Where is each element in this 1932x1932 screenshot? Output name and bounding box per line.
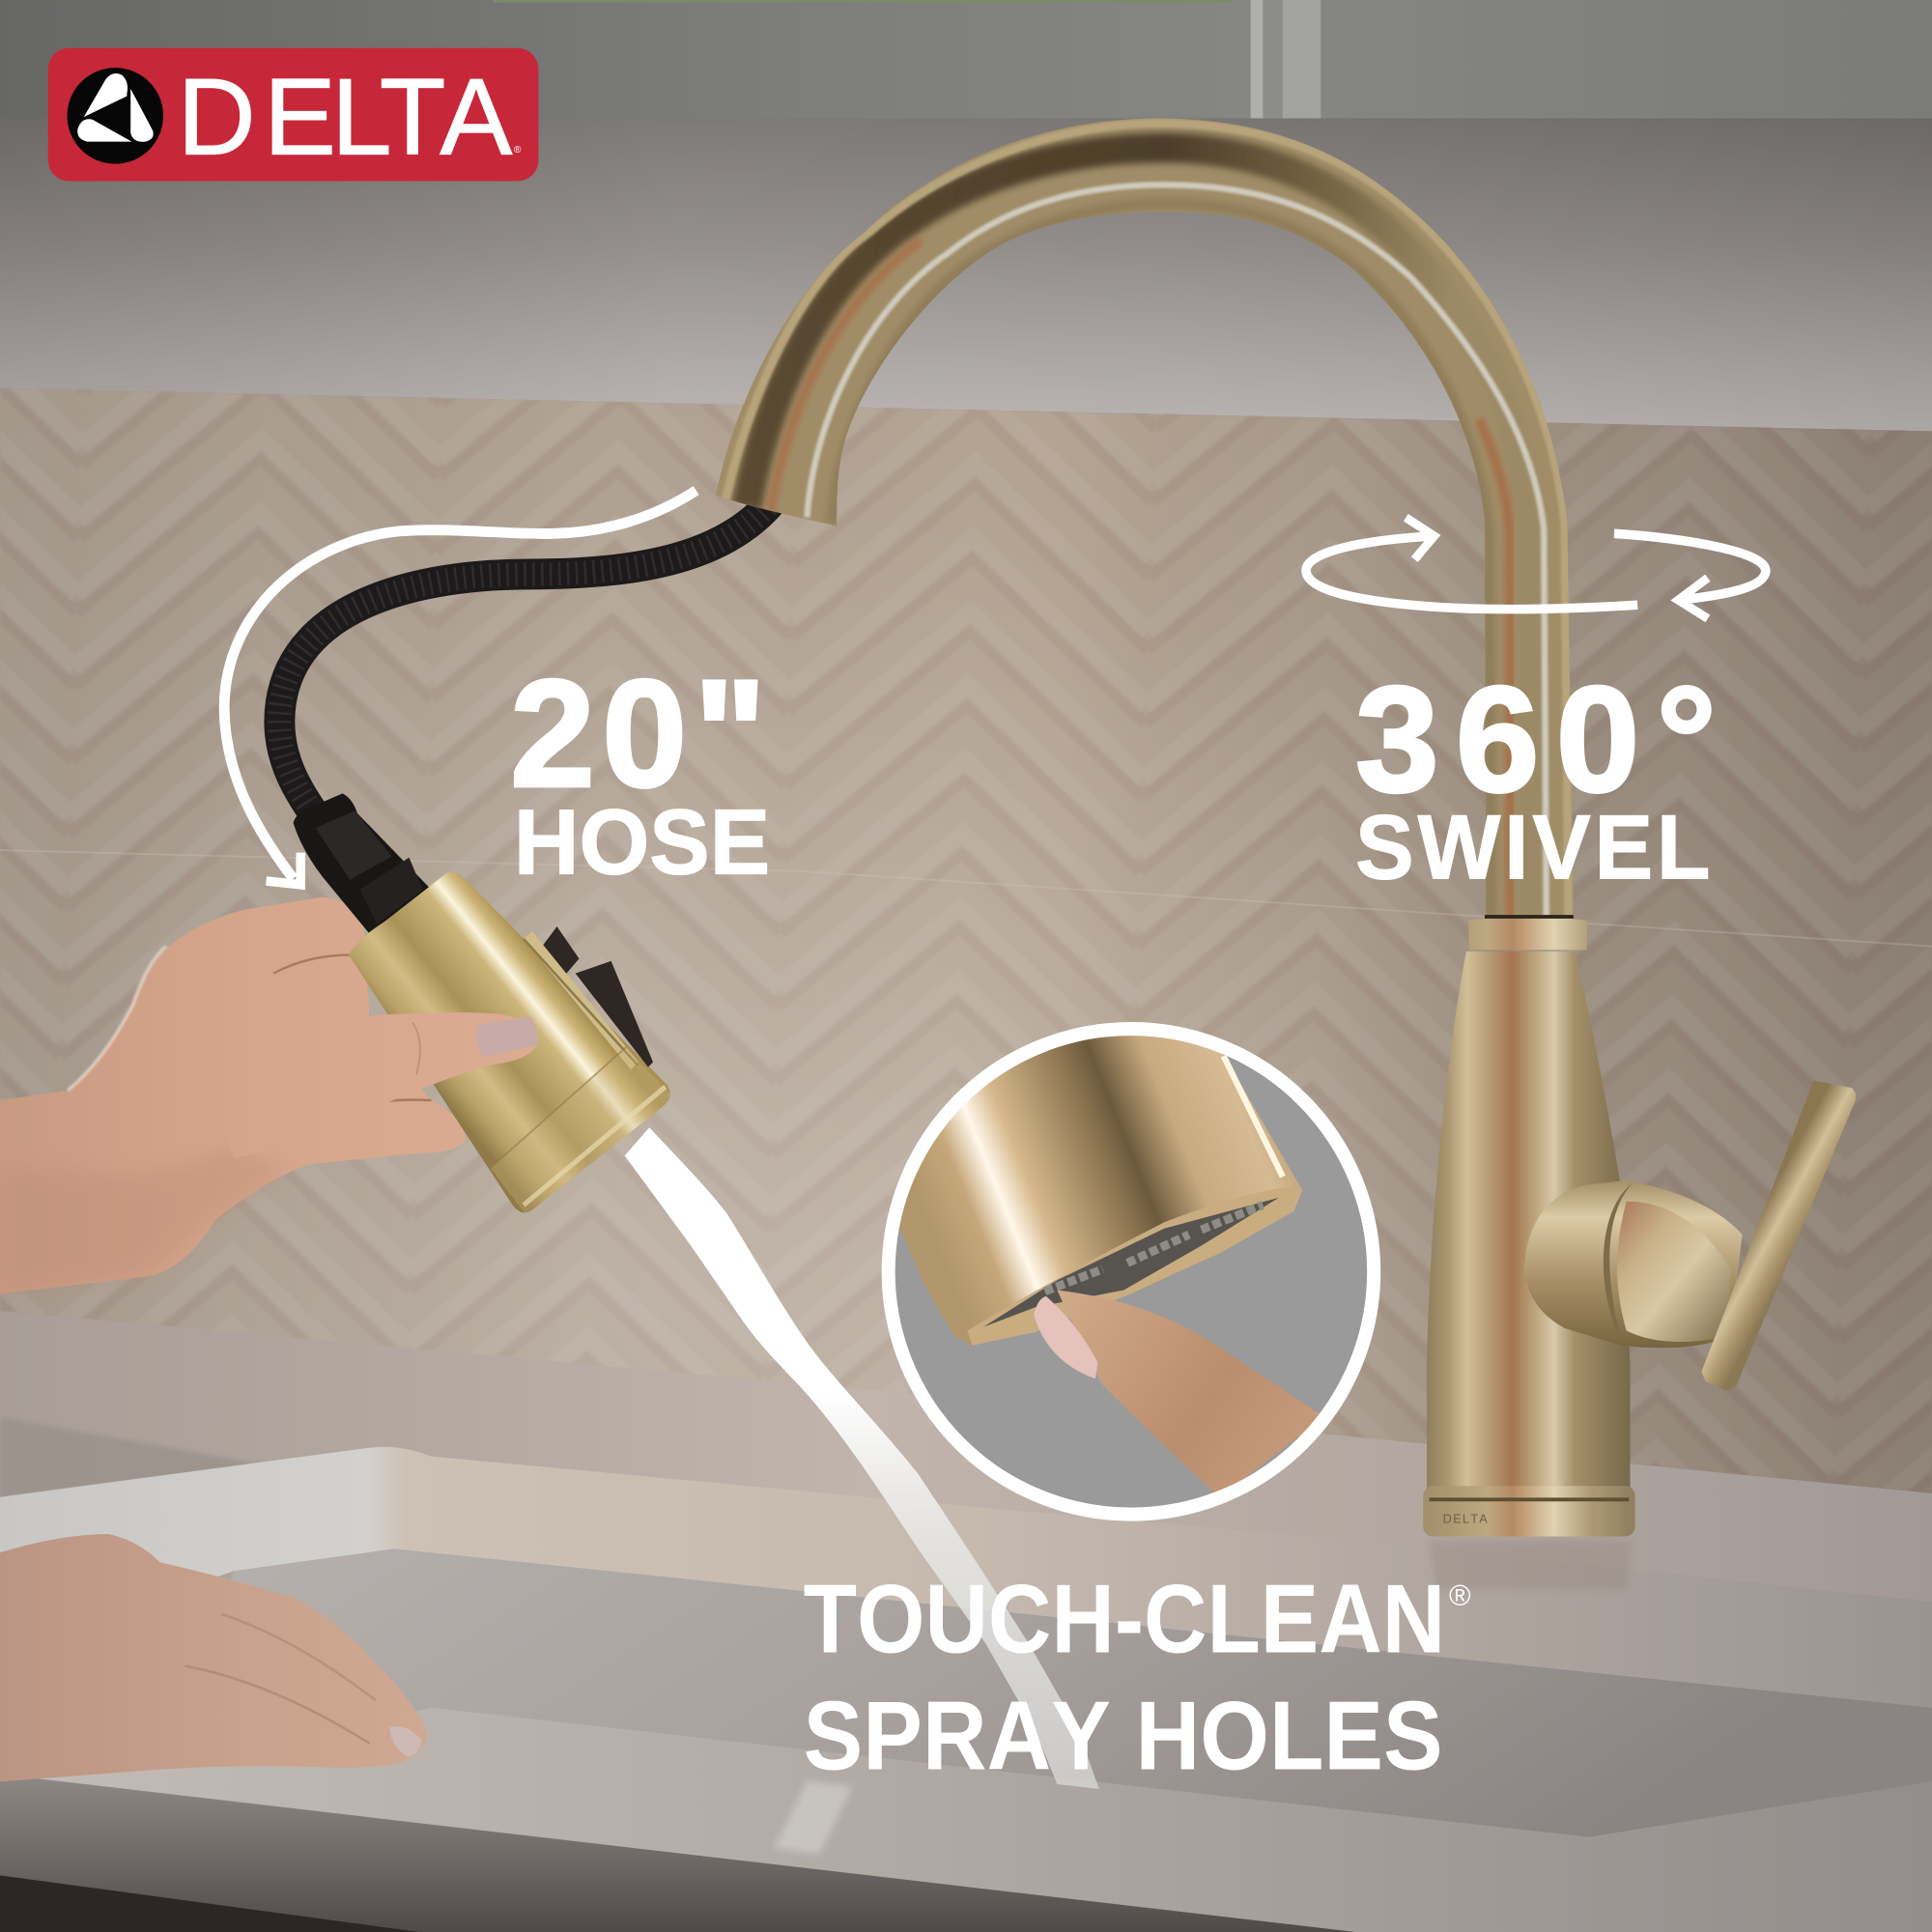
dark cabinet — [0, 1875, 419, 1932]
nail — [1034, 1296, 1097, 1378]
spray holes — [983, 1198, 1279, 1327]
nozzle — [898, 1005, 1302, 1346]
fingernail — [389, 1726, 421, 1757]
fingertip — [1034, 1290, 1324, 1497]
callout: 360 degree swivel — [1355, 655, 1717, 898]
callout: touch-clean spray holes — [804, 1565, 1471, 1791]
hose connector — [294, 793, 431, 934]
callout: touch-clean spray holes: TOUCH-CLEAN — [804, 1565, 1445, 1673]
logo mark — [68, 68, 163, 164]
collar — [1468, 917, 1587, 950]
faucet body — [1423, 917, 1635, 1537]
callout: 360 degree swivel: 360° — [1355, 655, 1717, 823]
callout: touch-clean spray holes: SPRAY HOLES — [804, 1683, 1443, 1791]
sink rim — [0, 1447, 1932, 1713]
arrow: swivel right — [1614, 533, 1766, 618]
sprayer buttons — [542, 926, 653, 1067]
arrow: hose length — [224, 491, 696, 885]
hand holding sprayer — [0, 897, 466, 1293]
logo: Delta — [48, 48, 538, 181]
hose — [279, 499, 774, 819]
callout: 20 inch hose: 20" — [510, 648, 766, 819]
inset circle: touch-clean spray holes — [889, 1005, 1374, 1515]
sink basin — [160, 1548, 1932, 1837]
handle — [1524, 1081, 1856, 1391]
callout: 20 inch hose — [510, 648, 770, 894]
index finger over sprayer — [210, 1012, 538, 1158]
counter shadow band — [0, 1417, 271, 1501]
chevron tile backsplash — [0, 388, 1932, 1493]
callout: touch-clean spray holes: ® — [1449, 1579, 1471, 1612]
logo: Delta: DELTA — [178, 55, 512, 177]
front counter — [0, 1708, 1932, 1932]
sprayer head — [349, 872, 675, 1220]
logo: Delta: ® — [514, 145, 522, 156]
base ring — [1423, 1486, 1635, 1537]
arrow: swivel left — [1306, 518, 1637, 610]
fingernail — [476, 1016, 538, 1057]
water reflection — [774, 1780, 853, 1855]
base ring: DELTA — [1443, 1512, 1489, 1526]
soffit wall — [0, 118, 1932, 431]
callout: 20 inch hose: HOSE — [514, 790, 770, 894]
callout: 360 degree swivel: SWIVEL — [1355, 797, 1714, 898]
counter front face — [0, 1775, 1355, 1932]
faucet spout — [716, 118, 1574, 918]
window band at top — [0, 0, 1932, 120]
countertop — [0, 1311, 1932, 1932]
hand on sink — [0, 1534, 428, 1781]
faucet base reflection — [1430, 1540, 1633, 1589]
lever — [1701, 1081, 1856, 1391]
water stream — [625, 1127, 1099, 1789]
